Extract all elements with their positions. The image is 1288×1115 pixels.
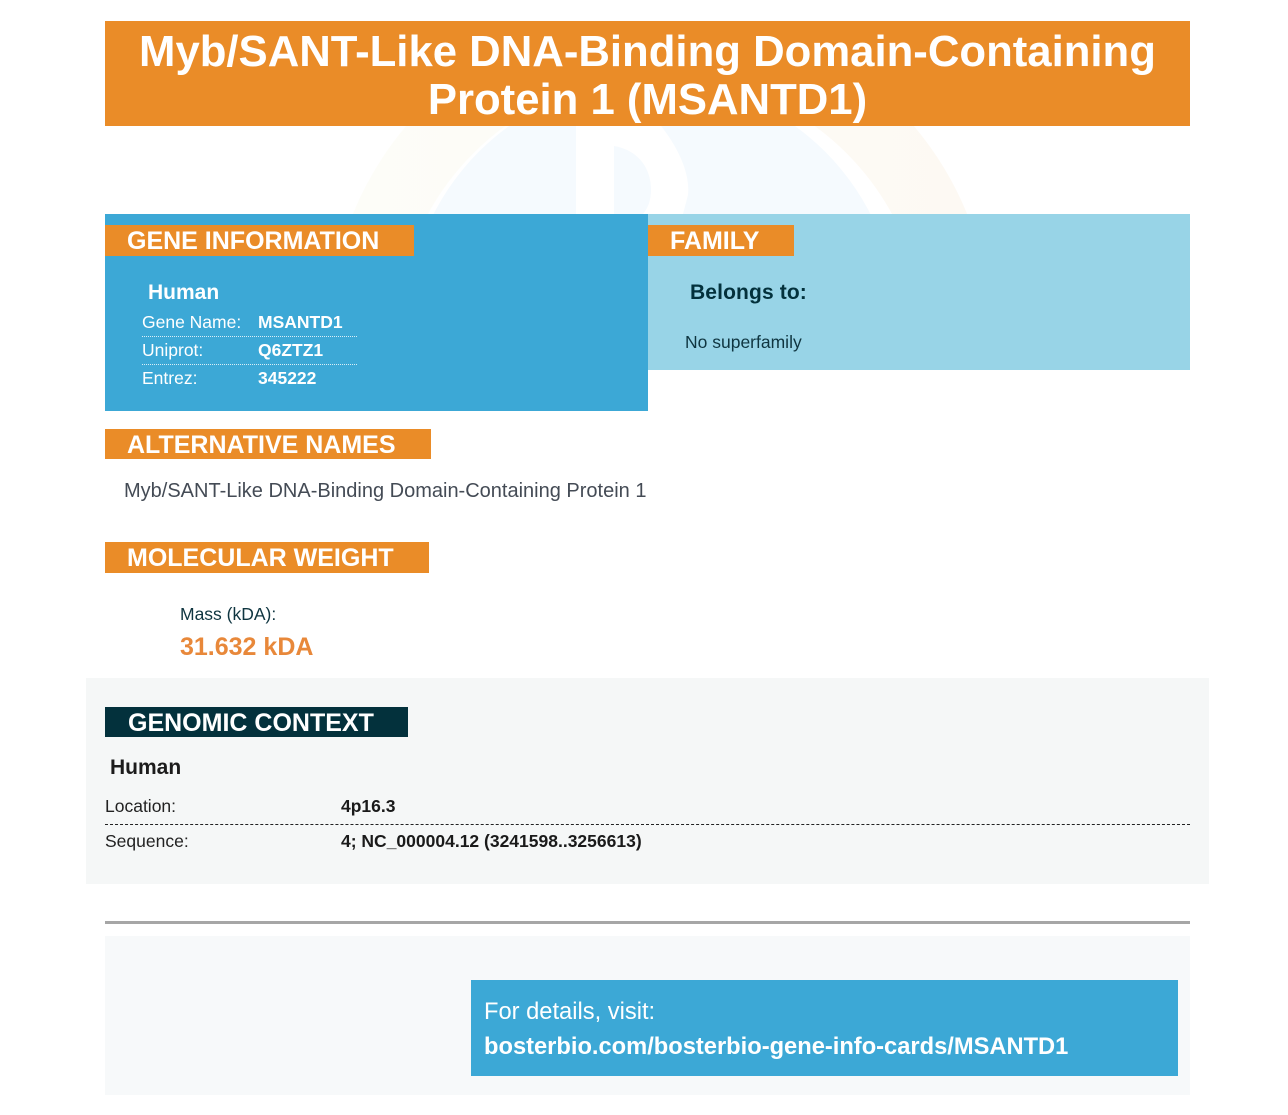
gene table: [142, 312, 357, 388]
mass value: 31.632 kDA: [180, 633, 313, 661]
entrez row: [142, 368, 316, 388]
visit url: bosterbio.com/bosterbio-gene-info-cards/MSANTD1: [484, 1034, 1068, 1060]
title banner: [105, 21, 1190, 126]
panel: genomic context: [86, 678, 1209, 884]
panel: gene information: [105, 214, 648, 411]
superfamily text: No superfamily: [685, 332, 802, 352]
heading: gene information: GENE INFORMATION: [127, 227, 379, 255]
location row: 4p16.3: [341, 796, 395, 816]
entrez row: Entrez:: [142, 368, 197, 388]
title line 2: Protein 1 (MSANTD1): [428, 75, 867, 124]
species label: Human: [110, 756, 181, 779]
sequence row: [105, 831, 642, 851]
sequence row: Sequence:: [105, 831, 189, 851]
entrez row: 345222: [258, 368, 316, 388]
mass label: Mass (kDA):: [180, 604, 276, 624]
title line 1: Myb/SANT-Like DNA-Binding Domain-Containing: [139, 27, 1156, 76]
gene name row: Gene Name:: [142, 312, 241, 332]
gene name row: MSANTD1: [258, 312, 343, 332]
belongs to label: Belongs to:: [690, 281, 807, 304]
gene name row: [142, 308, 357, 337]
location row: [105, 793, 1190, 825]
watermark logo: [434, 126, 967, 214]
panel: family: [648, 214, 1190, 370]
heading: family: FAMILY: [670, 227, 759, 255]
uniprot row: Q6ZTZ1: [258, 340, 323, 360]
alternative names text: Myb/SANT-Like DNA-Binding Domain-Containing Protein 1: [124, 480, 646, 502]
callout: details link: [471, 980, 1178, 1076]
heading: alternative names: ALTERNATIVE NAMES: [127, 431, 396, 459]
species label: Human: [148, 281, 219, 304]
panel: footer: [105, 936, 1190, 1095]
separator rule: [105, 921, 1190, 924]
visit label: For details, visit:: [484, 999, 655, 1025]
sequence row: 4; NC_000004.12 (3241598..3256613): [341, 831, 642, 851]
location row: Location:: [105, 796, 176, 816]
heading: genomic context: GENOMIC CONTEXT: [128, 709, 374, 737]
heading: molecular weight: MOLECULAR WEIGHT: [127, 544, 394, 572]
uniprot row: Uniprot:: [142, 340, 203, 360]
uniprot row: [142, 336, 357, 365]
heading: family: [648, 225, 794, 256]
